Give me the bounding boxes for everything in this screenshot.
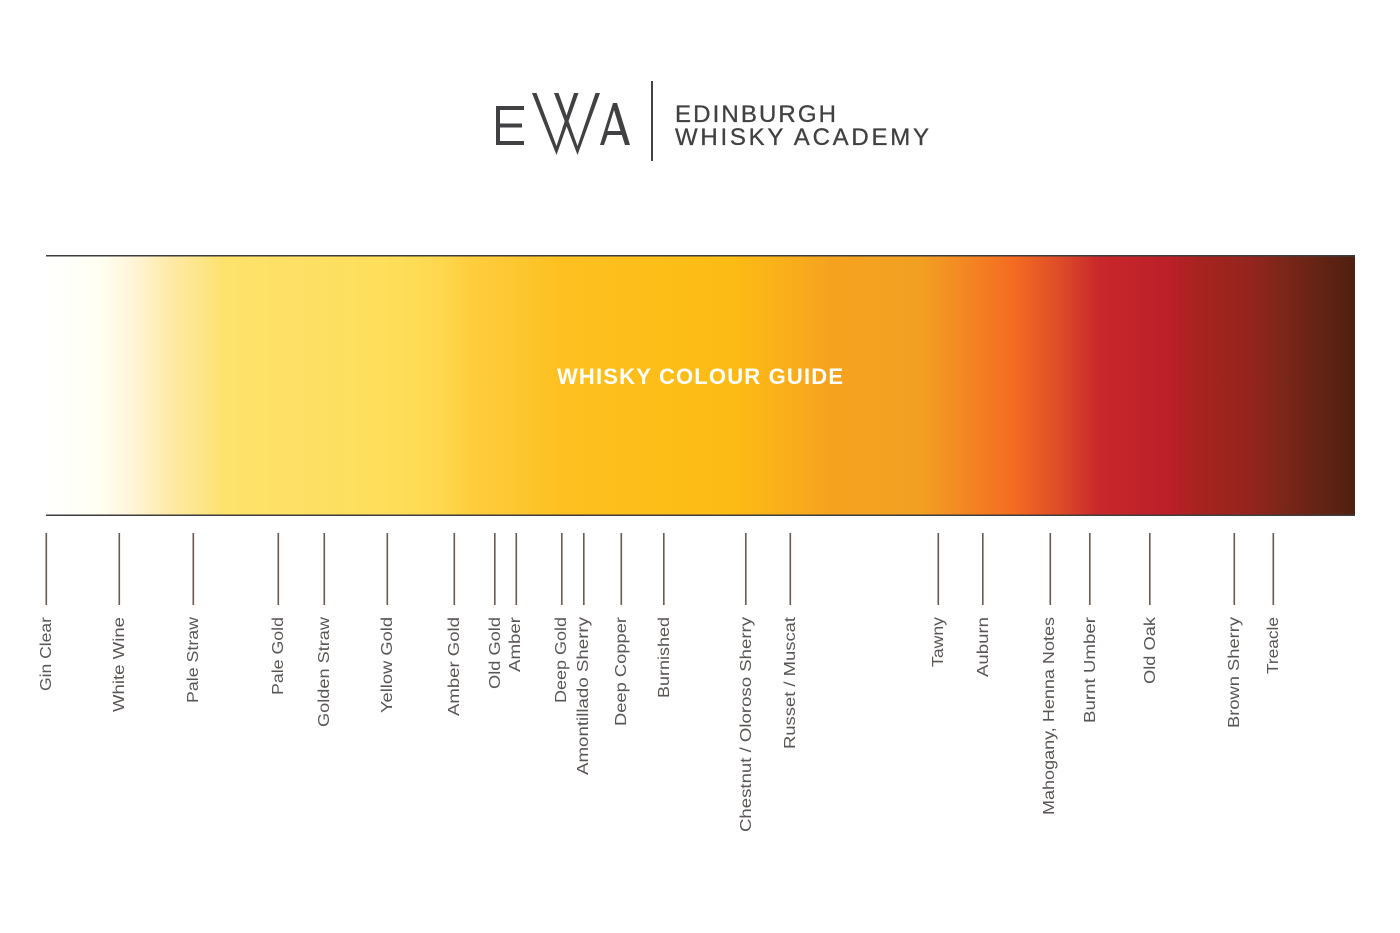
tick: Treacle: Treacle — [1265, 617, 1282, 674]
tick: Amber — [507, 533, 524, 672]
tick: Brown Sherry: Brown Sherry — [1226, 617, 1243, 728]
logo divider — [651, 81, 653, 161]
logo wordmark: WHISKY ACADEMY — [675, 124, 929, 151]
logo mark: EWA monogram — [496, 93, 630, 155]
tick: Tawny — [930, 533, 947, 667]
logo wordmark: EDINBURGH — [675, 101, 836, 128]
logo wordmark — [675, 101, 929, 151]
tick: Deep Copper: Deep Copper — [613, 616, 630, 726]
tick: Chestnut / Oloroso Sherry: Chestnut / Oloroso Sherry — [738, 617, 755, 832]
tick: Golden Straw: Golden Straw — [316, 616, 333, 727]
tick: Old Oak: Old Oak — [1142, 616, 1159, 684]
tick: Amber: Amber — [507, 616, 524, 672]
tick: Gin Clear: Gin Clear — [38, 616, 55, 691]
tick: Russet / Muscat: Russet / Muscat — [782, 616, 799, 749]
tick: Amber Gold: Amber Gold — [446, 617, 463, 716]
tick: Auburn: Auburn — [975, 617, 992, 677]
tick: Burnished: Burnished — [656, 617, 673, 698]
tick: Amontillado Sherry: Amontillado Sherry — [575, 617, 592, 775]
tick: Yellow Gold: Yellow Gold — [379, 617, 396, 713]
tick: Old Gold: Old Gold — [487, 617, 504, 689]
tick: White Wine: White Wine — [111, 617, 128, 712]
bar title: WHISKY COLOUR GUIDE — [557, 364, 843, 389]
tick: Tawny: Tawny — [930, 617, 947, 667]
colour scale ticks and labels — [38, 533, 1282, 832]
tick: Deep Gold: Deep Gold — [553, 617, 570, 703]
logo: Edinburgh Whisky Academy — [496, 81, 929, 161]
colour gradient bar — [46, 255, 1355, 516]
tick: Pale Gold: Pale Gold — [270, 617, 287, 695]
tick: Mahogany, Henna Notes: Mahogany, Henna Notes — [1041, 617, 1058, 815]
tick: Burnt Umber: Burnt Umber — [1082, 616, 1099, 723]
tick: Pale Straw: Pale Straw — [185, 617, 202, 703]
